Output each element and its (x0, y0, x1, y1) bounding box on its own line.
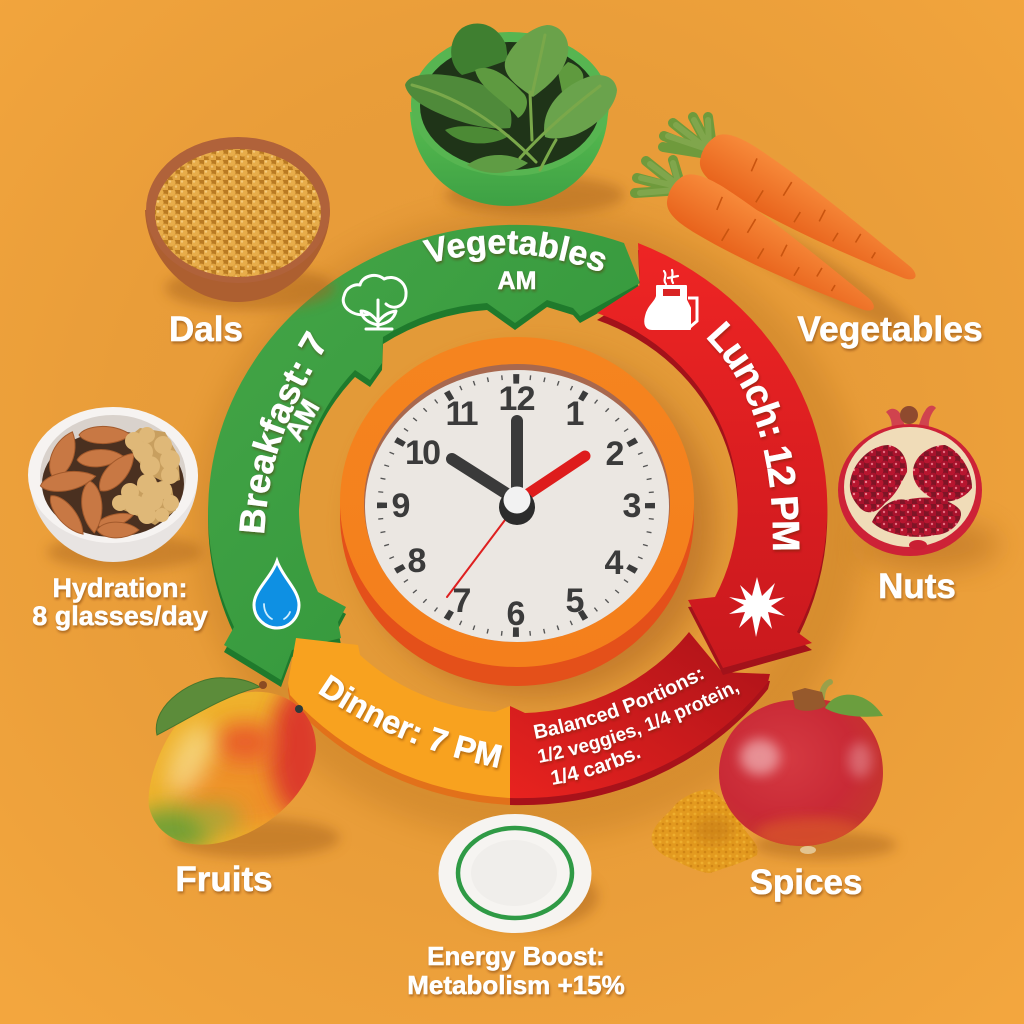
clock numerals: 8 (408, 542, 426, 580)
arc: Balanced Portions red banner (510, 632, 770, 806)
text: Hydration label (32, 573, 208, 631)
icon: jar with steam (645, 270, 697, 329)
walnuts (112, 427, 180, 525)
clock shadow (355, 353, 715, 697)
fruit stem (822, 682, 830, 698)
clock numerals: 6 (507, 595, 525, 633)
arc: Dinner orange banner (288, 638, 510, 805)
clock hands (447, 421, 585, 597)
text: Lunch 12 PM: Lunch: 12 PM (706, 320, 802, 553)
arc: Breakfast and Vegetables green banner (208, 224, 640, 687)
food: red fruit with leaf (719, 682, 897, 859)
food: turmeric powder pile (652, 790, 758, 873)
food: cut pomegranate (838, 406, 1000, 571)
clock ticks (380, 377, 652, 634)
text: AM under Breakfast: AM (279, 394, 325, 446)
text: Vegetables label: Vegetables (797, 309, 983, 349)
food: carrots (635, 117, 929, 347)
food: spinach in green bowl (405, 23, 625, 215)
text: Vegetables: Vegetables (422, 231, 608, 274)
clock numerals: 3 (623, 487, 641, 525)
icon: starburst (729, 577, 785, 637)
text: Dals label: Dals (169, 310, 243, 349)
food: mango with leaf (132, 678, 340, 858)
food: almonds and walnuts in white bowl (28, 407, 203, 570)
clock numerals: 11 (446, 395, 478, 433)
clock numerals: 12 (498, 380, 536, 418)
text: portion guidance: 1/4 carbs. (551, 750, 642, 788)
text: Dinner 7 PM: Dinner: 7 PM (318, 674, 504, 771)
text: Spices label: Spices (750, 863, 862, 902)
clock numerals: 1 (566, 395, 584, 433)
mango colour blush (148, 693, 316, 845)
text: Nuts label: Nuts (878, 567, 956, 606)
text: Energy Boost label: Energy Boost: (427, 941, 605, 971)
text: Energy Boost label: Metabolism +15% (407, 970, 625, 1000)
icon: tree outline (343, 275, 406, 329)
back carrot (691, 124, 929, 300)
text: Fruits label: Fruits (175, 860, 273, 899)
text: Hydration label: Hydration: (52, 573, 188, 603)
clock numerals: 5 (566, 582, 584, 620)
clock face (365, 370, 669, 642)
text: portion guidance: 1/2 veggies, 1/4 protein, (538, 685, 742, 766)
plate (438, 814, 598, 933)
text: Energy Boost label (407, 941, 625, 1000)
arc: Lunch red banner (597, 243, 828, 675)
fruit leaf (825, 695, 883, 717)
wheel drop shadow (225, 240, 835, 810)
clock numerals: 9 (392, 487, 410, 525)
text: Hydration label: 8 glasses/day (32, 601, 208, 631)
clock numerals: 7 (453, 582, 471, 620)
crown center (900, 406, 918, 424)
pomegranate seed clusters (850, 445, 972, 537)
clock numerals: 4 (605, 544, 624, 582)
food: lentils in terracotta bowl (145, 137, 335, 310)
clock numerals: 10 (405, 434, 441, 472)
clock numerals (392, 380, 641, 633)
icon: water drop (254, 561, 299, 628)
spinach leaves (405, 23, 617, 173)
mango leaf (156, 678, 260, 735)
almonds (39, 426, 141, 540)
text: portion guidance: Balanced Portions: (534, 669, 706, 742)
tan disc behind clock (295, 298, 739, 722)
front carrot (658, 164, 888, 331)
fruit crown (792, 688, 826, 711)
carrot greens (635, 117, 713, 193)
clock numerals: 2 (606, 435, 624, 473)
clock (340, 337, 694, 686)
text: Breakfast 7: Breakfast: 7 (239, 330, 326, 536)
mango stem (259, 681, 267, 689)
text: AM under Vegetables: AM (498, 267, 536, 295)
